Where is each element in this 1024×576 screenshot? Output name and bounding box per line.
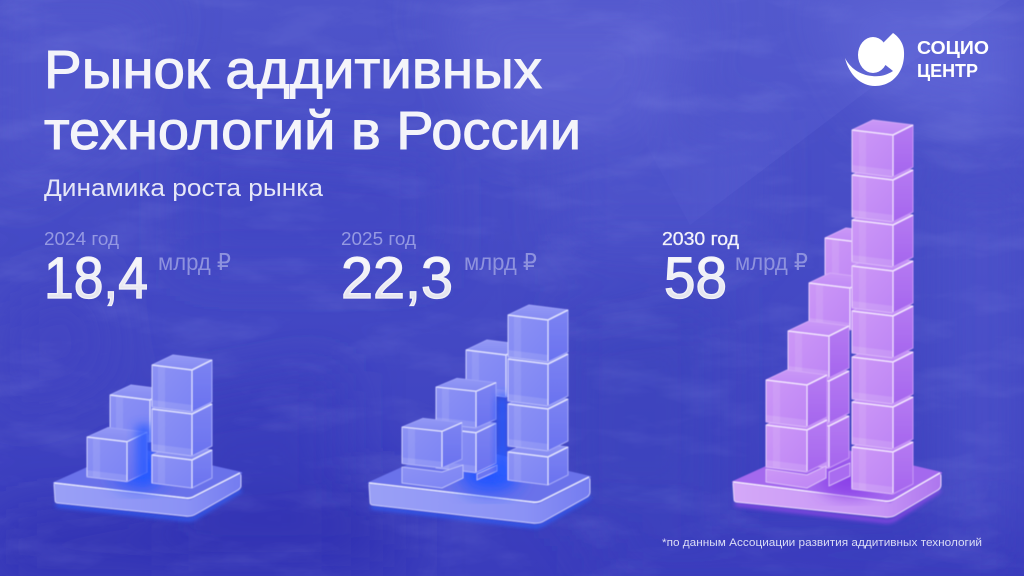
title: [44, 40, 581, 161]
subtitle: Динамика роста рынка: [44, 175, 323, 202]
logo: Социо Центр: [845, 33, 989, 86]
year label 2025: 2025 год: [341, 229, 417, 249]
year label 2030: 2030 год: [662, 229, 740, 249]
panel: 2030: [662, 120, 941, 521]
unit: млрд ₽: [158, 249, 231, 275]
panel: 2025: [341, 229, 590, 526]
logo wordmark: СОЦИО: [917, 37, 989, 58]
icon: logo mark: [845, 33, 904, 86]
chart: 2025 cubes: [369, 305, 590, 526]
chart: 2024 cubes: [54, 355, 241, 519]
unit: млрд ₽: [464, 249, 537, 275]
value 22,3: 22,3: [341, 246, 453, 311]
year label 2024: 2024 год: [44, 229, 120, 249]
unit: млрд ₽: [735, 249, 808, 275]
footnote: *по данным Ассоциации развития аддитивных технологий: [662, 537, 982, 549]
value 58: 58: [664, 246, 727, 311]
chart: 2030 cubes: [733, 120, 941, 521]
title: технологий в России: [44, 101, 581, 161]
panel: 2024: [44, 229, 241, 519]
logo wordmark: ЦЕНТР: [917, 60, 978, 81]
title: Рынок аддитивных: [44, 40, 542, 100]
logo wordmark: [917, 37, 989, 81]
value 18,4: 18,4: [44, 246, 148, 311]
